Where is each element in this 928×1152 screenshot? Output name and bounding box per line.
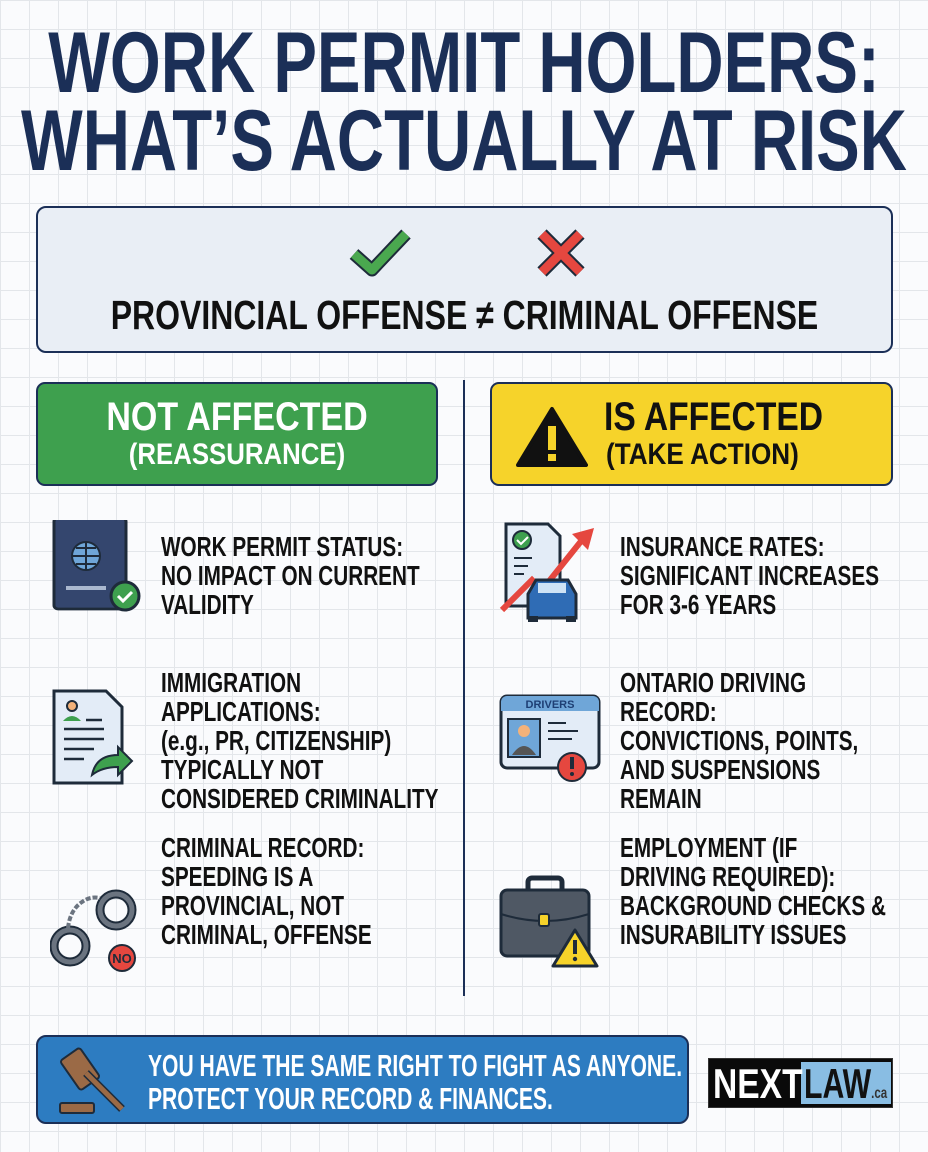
item: insurance rates: INSURANCE RATES: (620, 531, 825, 562)
icon: warning (516, 406, 588, 467)
item: ontario driving record: AND SUSPENSIONS (620, 754, 820, 785)
item: immigration applications: (e.g., PR, CITIZENSHIP) (161, 725, 391, 756)
title: WHAT’S ACTUALLY AT RISK (21, 93, 907, 189)
panel header: is affected: IS AFFECTED (604, 395, 823, 439)
icon: gavel (59, 1048, 125, 1114)
item: insurance rates (500, 522, 879, 622)
item: employment (500, 832, 886, 968)
logo: nextlaw: NEXT (713, 1060, 803, 1107)
item: work permit status: VALIDITY (161, 589, 254, 620)
item: ontario driving record (500, 667, 858, 814)
item: criminal record: PROVINCIAL, NOT (161, 890, 344, 921)
panel header: is affected (490, 382, 893, 486)
item: criminal record (50, 832, 372, 972)
title: WORK PERMIT HOLDERS: (48, 15, 880, 111)
icon: check (350, 230, 411, 276)
heading: provincial vs criminal: PROVINCIAL OFFENSE ≠ CRIMINAL OFFENSE (111, 292, 818, 338)
item: immigration applications: IMMIGRATION (161, 667, 301, 698)
banner: call to action: YOU HAVE THE SAME RIGHT TO FIGHT AS ANYONE. (148, 1048, 682, 1083)
icon: passport (52, 520, 140, 612)
item: criminal record: SPEEDING IS A (161, 861, 313, 892)
item: ontario driving record: REMAIN (620, 783, 702, 814)
item: criminal record: CRIMINAL RECORD: (161, 832, 364, 863)
logo: nextlaw (708, 1058, 893, 1108)
banner: call to action: PROTECT YOUR RECORD & FINANCES. (148, 1081, 553, 1116)
logo: nextlaw: LAW.ca (804, 1060, 887, 1107)
icon: handcuffs: NO (112, 951, 132, 966)
item: immigration applications (52, 667, 438, 814)
panel header: not affected: (REASSURANCE) (129, 438, 345, 471)
item: immigration applications: CONSIDERED CRIMINALITY (161, 783, 438, 814)
icon: driver's licence (500, 694, 600, 782)
item: employment: BACKGROUND CHECKS & (620, 890, 886, 921)
item: work permit status: NO IMPACT ON CURRENT (161, 560, 420, 591)
icon: insurance chart with car (500, 522, 594, 622)
item: insurance rates: SIGNIFICANT INCREASES (620, 560, 879, 591)
item: work permit status: WORK PERMIT STATUS: (161, 531, 403, 562)
icon: handcuffs (50, 890, 136, 972)
icon: driver's licence: DRIVERS (526, 699, 574, 711)
icon: cross (538, 229, 584, 277)
icon: briefcase with warning (500, 876, 599, 968)
item: insurance rates: FOR 3-6 YEARS (620, 589, 776, 620)
panel: comparison box (36, 206, 893, 353)
panel header: not affected (36, 382, 438, 486)
item: immigration applications: TYPICALLY NOT (161, 754, 323, 785)
panel header: not affected: NOT AFFECTED (106, 395, 368, 439)
banner: call to action (36, 1035, 689, 1124)
item: immigration applications: APPLICATIONS: (161, 696, 321, 727)
panel header: is affected: (TAKE ACTION) (606, 438, 799, 471)
divider (463, 380, 465, 996)
item: employment: EMPLOYMENT (IF (620, 832, 797, 863)
item: ontario driving record: CONVICTIONS, POINTS, (620, 725, 858, 756)
item: ontario driving record: RECORD: (620, 696, 717, 727)
item: work permit status (52, 520, 420, 620)
item: criminal record: CRIMINAL, OFFENSE (161, 919, 372, 950)
title (21, 15, 907, 189)
item: ontario driving record: ONTARIO DRIVING (620, 667, 806, 698)
item: employment: INSURABILITY ISSUES (620, 919, 846, 950)
icon: document with arrow (52, 690, 134, 784)
item: employment: DRIVING REQUIRED): (620, 861, 835, 892)
